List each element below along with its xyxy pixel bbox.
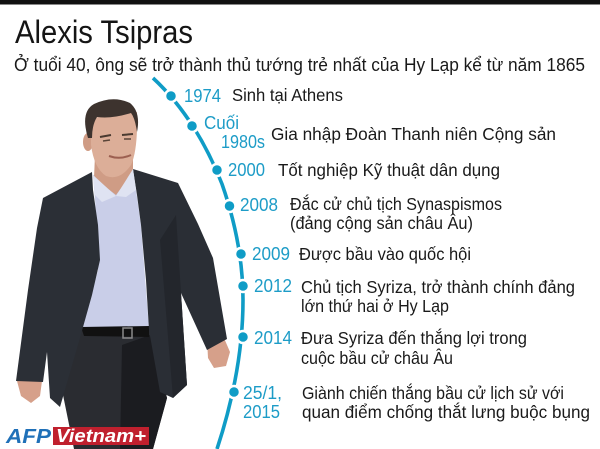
entry: 25/1/2015: Giành chiến thắng bầu cử lịch sử với bbox=[302, 382, 564, 403]
neck bbox=[94, 155, 133, 195]
smile bbox=[109, 155, 131, 158]
entry: 1974 bbox=[184, 85, 343, 106]
timeline dots bbox=[165, 90, 249, 398]
timeline curve bbox=[153, 78, 243, 449]
top black bar bbox=[0, 0, 600, 4]
right hand bbox=[207, 338, 230, 368]
entry: late 1980s: Gia nhập Đoàn Thanh niên Cộng sản bbox=[271, 124, 556, 144]
entry: 2014: cuộc bầu cử châu Âu bbox=[301, 348, 453, 368]
left hand bbox=[17, 381, 42, 403]
face bbox=[91, 112, 137, 177]
entry: 25/1/2015: quan điểm chống thắt lưng buộc bụng bbox=[302, 401, 590, 422]
hair bbox=[85, 99, 138, 138]
entry: 1974: Sinh tại Athens bbox=[232, 85, 343, 105]
entry: 2014: 2014 bbox=[254, 328, 292, 348]
entry: 25/1/2015 bbox=[243, 382, 590, 422]
entry: 2012: Chủ tịch Syriza, trở thành chính đảng bbox=[301, 277, 575, 297]
logo: AFP Vietnam+: AFP bbox=[5, 426, 52, 448]
entry: 2000: 2000 bbox=[228, 160, 265, 180]
entry: 2012 bbox=[254, 276, 575, 316]
belt bbox=[81, 326, 149, 337]
entry: late 1980s: 1980s bbox=[221, 132, 265, 152]
entry: late 1980s bbox=[204, 113, 556, 152]
entry: 2008 bbox=[240, 193, 502, 233]
entry: 2008: Đắc cử chủ tịch Synaspismos bbox=[290, 193, 502, 214]
logo: AFP Vietnam+: Vietnam+ bbox=[56, 426, 147, 446]
shirt bbox=[82, 169, 149, 328]
entry: 2009: Được bầu vào quốc hội bbox=[299, 244, 471, 264]
entry: 2008: 2008 bbox=[240, 195, 278, 215]
title: Alexis Tsipras bbox=[15, 14, 193, 50]
entry: late 1980s: Cuối bbox=[204, 113, 239, 133]
entry: 2012: 2012 bbox=[254, 276, 292, 296]
entry: 25/1/2015: 25/1, bbox=[243, 383, 282, 403]
entry: 2008: (đảng cộng sản châu Âu) bbox=[290, 213, 473, 233]
entry: 25/1/2015: 2015 bbox=[243, 402, 280, 422]
entry: 1974: 1974 bbox=[184, 86, 221, 106]
head and face bbox=[83, 99, 138, 177]
entry: 2014 bbox=[254, 327, 527, 368]
entry: 2000: Tốt nghiệp Kỹ thuật dân dụng bbox=[278, 160, 500, 180]
entry: 2014: Đưa Syriza đến thắng lợi trong bbox=[301, 327, 527, 348]
trousers bbox=[62, 328, 167, 449]
entry: 2012: lớn thứ hai ở Hy Lạp bbox=[301, 296, 449, 316]
shirt collar bbox=[93, 169, 136, 202]
entry: 2009: 2009 bbox=[252, 244, 290, 264]
eyes and brows bbox=[100, 134, 133, 137]
logo: AFP Vietnam+ bbox=[5, 426, 149, 448]
ears bbox=[83, 133, 93, 151]
illustration: Alexis Tsipras walking bbox=[16, 99, 230, 449]
suit jacket left bbox=[16, 172, 100, 407]
suit jacket right bbox=[133, 169, 227, 398]
